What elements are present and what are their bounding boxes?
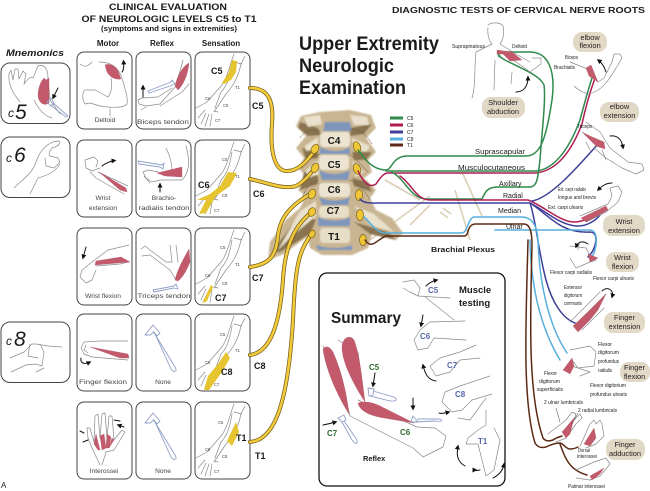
illustration: muscle testing hands: C8: [455, 390, 466, 399]
nerve name labels: Radial: [503, 193, 523, 200]
panel: sensation c7: [195, 228, 250, 305]
panel: motor wrist extension: extension: [89, 205, 117, 212]
panel: sensation c6: T1: [235, 174, 241, 179]
nerve name labels: Axillary: [499, 181, 522, 188]
test: finger extension: communis: [564, 301, 582, 307]
panel: motor wrist flexion: Wrist flexion: [85, 293, 121, 300]
test: finger extension: Finger: [614, 313, 636, 322]
panel: motor deltoid: [77, 52, 132, 129]
test: finger adduction: interossei: [577, 454, 597, 460]
panel: sensation c5: C6: [205, 96, 211, 101]
panel: sensation c5: C7: [215, 118, 221, 123]
test: wrist extension: Ext. carpi ulnaris: [548, 205, 583, 211]
test: finger adduction: 2 ulnar lumbricals: [544, 400, 583, 406]
test: finger flexion: flexion: [624, 372, 645, 381]
yellow nerve labels: C5: [252, 101, 264, 111]
test: finger flexion: profundus ulnaris: [590, 392, 627, 398]
panel: motor finger flexion: Finger flexion: [79, 379, 127, 386]
test: elbow extension: [577, 102, 644, 174]
test: finger flexion: [537, 342, 650, 398]
illustration: reflex arm: C7: [327, 429, 338, 438]
test: elbow extension: extension: [604, 111, 635, 120]
nerve name labels: Musculocutaneous: [458, 165, 526, 172]
panel: sensation c6: C8: [222, 193, 228, 198]
test: finger flexion: Flexor: [544, 371, 557, 377]
panel: sensation c5: C5: [211, 66, 223, 76]
legend: nerve root colours: C5: [407, 116, 414, 122]
panel: sensation c6: C6: [198, 180, 210, 190]
panel: mnemonic c8: 8: [14, 328, 26, 351]
panel: reflex biceps tendon: [136, 52, 191, 129]
nerve name labels: Ulnar: [506, 224, 523, 231]
vertebra labels: [327, 136, 341, 243]
test: shoulder abduction: Deltoid: [512, 44, 527, 50]
panel: sensation c8: C5: [220, 332, 226, 337]
test: wrist extension: Wrist: [616, 217, 632, 226]
illustration: muscle testing hands: C7: [447, 361, 458, 370]
test: wrist flexion: Flexor carpi radialis: [550, 270, 592, 276]
title: upper extremity neurologic examination: [299, 34, 439, 99]
nerve name labels: [458, 149, 526, 231]
panel: sensation t1: C5: [218, 420, 224, 425]
test: elbow flexion: elbow: [580, 33, 600, 42]
panel: motor wrist extension: Wrist: [96, 195, 111, 202]
brachial plexus background bones: [370, 172, 482, 240]
title: upper extremity neurologic examination: Examination: [299, 78, 406, 99]
panel: reflex triceps tendon: [136, 228, 191, 305]
column headings: Reflex: [150, 39, 175, 48]
column headings: Motor: [97, 39, 119, 48]
yellow nerve labels: C7: [252, 273, 264, 283]
panel: mnemonic c6: c: [6, 151, 12, 165]
heading: clinical evaluation: OF NEUROLOGIC LEVELS C5 to T1: [82, 14, 257, 25]
test: finger adduction: Finger: [615, 440, 636, 449]
legend: nerve root colours: C8: [407, 137, 414, 143]
panel: sensation c8: C6: [205, 360, 211, 365]
panel: sensation c8: C8: [221, 367, 233, 377]
legend: nerve root colours: T1: [407, 143, 413, 149]
test: elbow flexion: flexion: [579, 41, 601, 50]
test: finger flexion: radialis: [598, 368, 612, 374]
vertebra labels: C6: [328, 185, 341, 196]
panel: motor wrist flexion: [77, 228, 132, 305]
panel: sensation c6: [195, 140, 250, 217]
panel: sensation c7: T1: [235, 262, 241, 267]
test: wrist extension: extension: [608, 226, 640, 235]
heading: muscle testing: [459, 285, 491, 309]
test: finger flexion: superficialis: [537, 387, 563, 393]
test: finger extension: extension: [609, 322, 640, 331]
test: finger flexion: Finger: [624, 363, 646, 372]
panel: reflex none (t1): [136, 402, 191, 479]
test: finger extension: [564, 285, 645, 333]
panel: mnemonic c5: 5: [15, 101, 27, 124]
test: finger adduction: [544, 400, 645, 490]
test: wrist flexion: [550, 242, 639, 282]
yellow nerve labels: T1: [255, 451, 266, 461]
coloured peripheral nerves: [358, 52, 600, 475]
test: shoulder abduction: Shoulder: [488, 98, 518, 107]
test: wrist extension: longus and brevis: [558, 195, 596, 201]
panel: sensation c6: C7: [214, 208, 220, 213]
marker: figure letter A: A: [1, 481, 7, 490]
illustration: reflex arm: C6: [400, 428, 411, 437]
panel: sensation t1: C6: [205, 447, 211, 452]
panel: reflex none (t1): None: [155, 468, 171, 475]
panel: sensation c5: T1: [235, 85, 241, 90]
panel: sensation c8: C7: [214, 382, 220, 387]
yellow sensory nerves: [250, 88, 315, 442]
test: elbow flexion: [554, 32, 622, 94]
panel: sensation c8: [195, 314, 250, 391]
heading: clinical evaluation: (symptoms and signs in extremities): [101, 24, 238, 33]
panel: reflex triceps tendon: Triceps tendon: [138, 293, 191, 300]
heading: muscle testing: testing: [459, 298, 490, 309]
illustration: reflex arm: [323, 337, 446, 463]
panel: sensation c8: T1: [235, 348, 241, 353]
test: elbow extension: elbow: [610, 102, 630, 111]
heading: clinical evaluation: [82, 2, 257, 33]
test: wrist flexion: flexion: [612, 262, 633, 271]
panel: sensation t1: T1: [236, 433, 247, 443]
panel: mnemonic c6: 6: [14, 144, 26, 167]
panel: motor deltoid: Deltoid: [95, 117, 116, 124]
yellow nerve labels: C6: [253, 189, 265, 199]
legend: nerve root colours: C7: [407, 130, 414, 136]
illustration: reflex arm: Reflex: [363, 454, 386, 463]
test: finger flexion: digitorum: [598, 350, 619, 356]
panel: sensation c7: C6: [205, 273, 211, 278]
test: finger flexion: digitorum: [539, 379, 560, 385]
legend: nerve root colours: C6: [407, 123, 414, 129]
panel: motor finger flexion: [77, 314, 132, 391]
panel: sensation c7: C5: [220, 245, 226, 250]
panel: motor wrist extension: [77, 140, 132, 217]
illustration: muscle testing hands: T1: [478, 437, 488, 446]
test: wrist flexion: Flexor carpi ulnaris: [593, 276, 634, 282]
panel: reflex brachioradialis tendon: [136, 140, 191, 217]
panel: mnemonic c8: [1, 322, 70, 382]
test: finger adduction: Dorsal: [578, 448, 590, 454]
panel: reflex none (c8): None: [155, 379, 171, 386]
panel: sensation c5: [195, 52, 250, 129]
panel: mnemonic c5: c: [8, 106, 14, 120]
panel: sensation c7: C7: [215, 293, 227, 303]
test: shoulder abduction: Suprapinatous: [452, 44, 486, 50]
test: finger flexion: Flexor digitorium: [590, 383, 626, 389]
test: finger adduction: adduction: [609, 449, 641, 458]
panel: mnemonic c8: c: [6, 334, 12, 348]
panel: sensation t1: C8: [222, 454, 228, 459]
title: upper extremity neurologic examination: Neurologic: [299, 56, 394, 77]
test: finger flexion: Flexor: [598, 342, 612, 348]
test: shoulder abduction: [452, 23, 541, 118]
panel: reflex brachioradialis tendon: radialis tendon: [138, 205, 190, 212]
test: wrist flexion: Wrist: [614, 253, 631, 262]
panel: mnemonic c5: [1, 63, 70, 124]
vertebra labels: C7: [327, 206, 340, 217]
title: upper extremity neurologic examination: Upper Extremity: [299, 34, 439, 55]
test: finger adduction: 2 radial lumbricals: [578, 408, 617, 414]
test: elbow flexion: Brachialis: [554, 65, 575, 71]
heading: summary: Summary: [331, 310, 401, 327]
yellow nerve labels: C8: [254, 361, 266, 371]
test: elbow extension: Triceps: [577, 124, 592, 130]
label: brachial plexus: Brachial Plexus: [431, 245, 495, 254]
test: wrist extension: Ext. carpi radialis: [558, 187, 586, 193]
column headings: Sensation: [202, 39, 240, 48]
yellow nerve labels: [252, 101, 266, 461]
illustration: muscle testing hands: [403, 280, 504, 478]
illustration: reflex arm: C5: [369, 363, 380, 372]
test: finger flexion: profundus: [598, 359, 619, 365]
test: finger extension: digitorum: [564, 293, 582, 299]
panel: motor interossei: Interossei: [90, 468, 119, 475]
column headings: [97, 39, 240, 48]
nerve name labels: Median: [498, 208, 521, 215]
panel: reflex biceps tendon: Biceps tendon: [137, 119, 189, 126]
panel: summary: [319, 273, 505, 486]
panel: mnemonic c6: [1, 137, 70, 198]
panel: sensation c7: C8: [222, 281, 228, 286]
test: shoulder abduction: abduction: [487, 107, 519, 116]
nerve root ganglia: [307, 141, 366, 246]
test: finger extension: Extensor: [564, 285, 582, 291]
panel: sensation c5: C8: [223, 103, 229, 108]
heading: clinical evaluation: CLINICAL EVALUATION: [109, 2, 227, 13]
test: elbow flexion: Biceps: [565, 55, 578, 61]
illustration: muscle testing hands: C6: [420, 332, 431, 341]
panel: reflex brachioradialis tendon: Brachio-: [152, 195, 176, 202]
vertebra labels: T1: [328, 232, 340, 243]
heading: muscle testing: Muscle: [459, 285, 491, 296]
legend: nerve root colours: [390, 116, 414, 149]
panel: sensation t1: C7: [214, 469, 220, 474]
panel: sensation t1: [195, 402, 250, 479]
nerve name labels: Suprascapular: [475, 149, 526, 156]
heading: mnemonics: Mnemonics: [6, 48, 64, 59]
panel: reflex none (c8): [136, 314, 191, 391]
panel: motor interossei: [77, 402, 132, 479]
test: finger adduction: Palmar interossei: [568, 484, 605, 490]
vertebra labels: C4: [328, 136, 341, 147]
test: wrist extension: [548, 183, 645, 236]
illustration: cervical spine: [268, 110, 403, 260]
illustration: muscle testing hands: C5: [428, 286, 439, 295]
heading: diagnostic tests: DIAGNOSTIC TESTS OF CERVICAL NERVE ROOTS: [392, 5, 645, 15]
panel: sensation c6: C5: [222, 157, 228, 162]
vertebra labels: C5: [328, 160, 341, 171]
